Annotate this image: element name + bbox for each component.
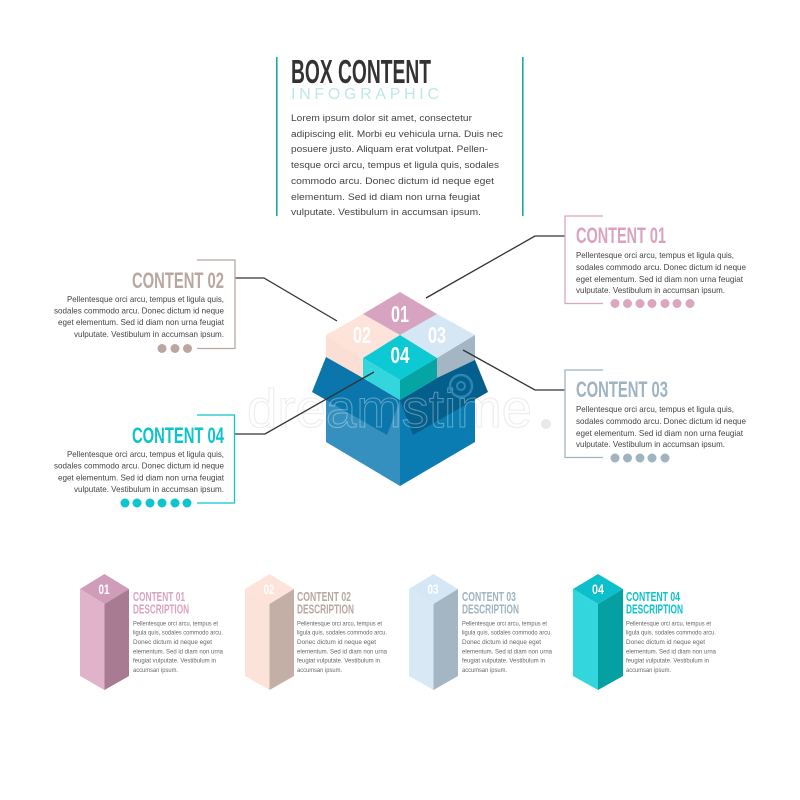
heading 02: CONTENT 02 [132,268,224,293]
description text: accumsan ipsum. [133,667,178,674]
dots 03 [610,454,670,462]
title: BOX CONTENT [291,53,431,90]
intro paragraph: elementum. Sed id diam non urna feugiat [291,192,480,203]
intro paragraph [291,113,503,218]
description text [133,620,224,674]
body 03: eget elementum. Sed id diam non urna feugiat [576,429,744,438]
heading: CONTENT 01 [133,590,185,604]
body 04 [54,450,225,494]
description text: ligula quis, sodales commodo arcu. [297,630,387,636]
heading: DESCRIPTION [626,602,683,616]
description text: Pellentesque orci arcu, tempus et [462,620,547,628]
body 03: Pellentesque orci arcu, tempus et ligula quis, [576,405,734,414]
intro paragraph: Lorem ipsum dolor sit amet, consectetur [291,113,473,124]
body 04: sodales commodo arcu. Donec dictum id neque [54,462,224,470]
body 03: vulputate. Vestibulum in accumsan ipsum. [576,440,725,449]
body 01: Pellentesque orci arcu, tempus et ligula quis, [576,251,734,260]
description text: accumsan ipsum. [297,667,342,674]
description text: feugiat vulputate. Vestibulum in [133,658,217,664]
box right face [400,357,475,486]
callout: content 04 [54,415,234,508]
panel: description 03 [409,574,553,690]
description text: elementum. Sed id diam non urna [133,648,224,656]
heading 01: CONTENT 01 [576,223,666,248]
dots 01 [610,299,694,308]
body 02 [54,295,225,339]
description text [297,620,388,674]
intro paragraph: posuere justo. Aliquam erat volutpat. Pellen- [291,144,488,155]
frame 04 [197,415,234,503]
dots 04 [120,498,192,508]
description text: accumsan ipsum. [462,667,507,674]
description text: ligula quis, sodales commodo arcu. [133,630,223,636]
connector: content 01 [426,236,565,298]
dots 02 [158,344,192,353]
number 01: 01 [391,301,409,327]
connector: content 02 [235,278,337,321]
heading 04: CONTENT 04 [132,423,225,448]
heading: DESCRIPTION [297,602,354,616]
body 02: Pellentesque orci arcu, tempus et ligula quis, [67,295,224,304]
body 02: sodales commodo arcu. Donec dictum id neque [54,306,224,316]
intro paragraph: vulputate. Vestibulum in accumsan ipsum. [291,207,481,218]
header panel [276,53,524,218]
header rule right [522,57,524,216]
heading [133,590,189,616]
intro paragraph: commodo arcu. Donec dictum id neque eget [291,176,494,187]
body 03 [576,405,746,449]
body 04: vulputate. Vestibulum in accumsan ipsum. [74,485,224,494]
heading [297,590,354,616]
description text: Donec dictum id neque eget [626,639,705,646]
left flap [312,357,400,435]
body 01: vulputate. Vestibulum in accumsan ipsum. [576,286,725,295]
number 04: 04 [390,342,410,368]
column 02 [245,574,294,690]
block 01 [363,292,437,335]
subtitle: INFOGRAPHIC [291,86,439,103]
callout: content 03 [565,370,746,462]
right flap [400,360,488,435]
description text: Donec dictum id neque eget [462,639,541,646]
heading: DESCRIPTION [462,602,519,616]
column number 02: 02 [264,581,275,597]
description text: elementum. Sed id diam non urna [462,648,553,656]
heading: CONTENT 02 [297,590,351,604]
number 02: 02 [353,322,371,348]
callout: content 02 [54,260,235,353]
description text: Pellentesque orci arcu, tempus et [626,620,711,628]
frame 02 [197,260,235,348]
description text: Pellentesque orci arcu, tempus et [297,620,382,628]
frame 01 [565,216,603,304]
body 04: eget elementum. Sed id diam non urna feugiat [58,474,225,482]
heading: CONTENT 04 [626,590,680,604]
column number 04: 04 [592,581,604,597]
body 01 [576,251,746,295]
column 04 [573,574,623,690]
block 03 [400,314,475,380]
description text [462,620,553,674]
frame 03 [565,370,603,458]
description text: feugiat vulputate. Vestibulum in [297,658,381,664]
description text: Donec dictum id neque eget [297,639,376,646]
body 03: sodales commodo arcu. Donec dictum id neque [576,417,746,426]
description text: Donec dictum id neque eget [133,639,212,646]
body 01: eget elementum. Sed id diam non urna feugiat [576,275,744,284]
body 02: eget elementum. Sed id diam non urna feugiat [58,318,225,327]
description text: elementum. Sed id diam non urna [297,648,388,656]
central open box illustration [312,292,488,486]
column number 01: 01 [98,581,110,597]
heading: DESCRIPTION [133,602,189,616]
heading [462,590,519,616]
heading [626,590,683,616]
description text: accumsan ipsum. [626,667,671,674]
panel: description 02 [245,574,388,690]
body 04: Pellentesque orci arcu, tempus et ligula quis, [67,450,224,459]
description text: elementum. Sed id diam non urna [626,648,717,656]
watermark overlay: dreamstime [247,379,532,439]
body 02: vulputate. Vestibulum in accumsan ipsum. [74,330,224,339]
column number 03: 03 [428,581,439,597]
connector: content 04 [235,372,374,434]
description text: ligula quis, sodales commodo arcu. [462,630,552,636]
description text [626,620,717,674]
header rule left [276,57,278,216]
column 01 [80,574,129,690]
column 03 [409,574,458,690]
watermark: dreamstime [247,379,532,439]
description text: ligula quis, sodales commodo arcu. [626,630,716,636]
panel: description 01 [80,574,224,690]
intro paragraph: adipiscing elit. Morbi eu vehicula urna. Duis nec [291,129,503,140]
intro paragraph: tesque orci arcu, tempus et ligula quis, sodales [291,160,499,171]
number 03: 03 [428,322,446,348]
description text: Pellentesque orci arcu, tempus et [133,620,218,628]
connector: content 03 [463,350,565,390]
box left face [326,357,400,486]
heading 03: CONTENT 03 [576,377,668,402]
callout: content 01 [565,216,746,308]
body 01: sodales commodo arcu. Donec dictum id neque [576,263,746,272]
heading: CONTENT 03 [462,590,516,604]
block 02 [326,314,400,380]
block 04 [363,335,437,400]
description text: feugiat vulputate. Vestibulum in [626,658,710,664]
panel: description 04 [573,574,717,690]
description text: feugiat vulputate. Vestibulum in [462,658,546,664]
